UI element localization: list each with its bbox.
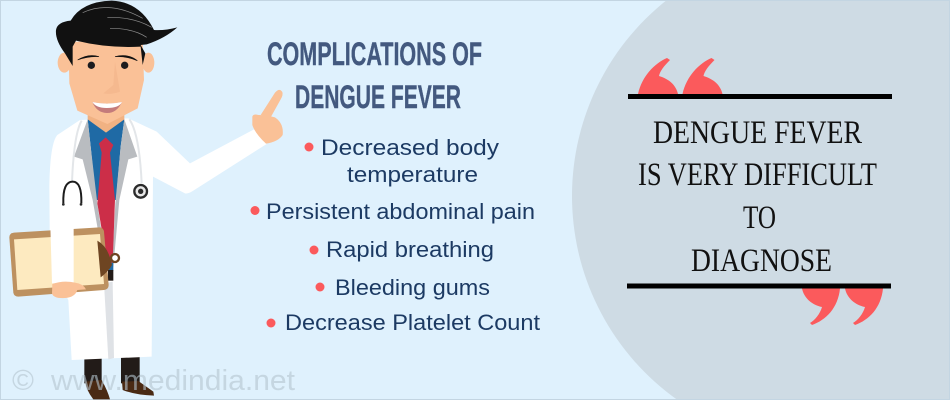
white coat and pointing arm	[49, 118, 267, 360]
doctor illustration	[9, 1, 283, 399]
item: decrease platelet count: Decrease Platelet Count	[285, 310, 540, 335]
pointing hand	[252, 90, 283, 144]
quote text: DENGUE FEVER	[653, 115, 862, 151]
bottom rule	[627, 284, 891, 288]
item: decreased body temperature: Decreased body	[321, 135, 499, 160]
panel: grey circle	[572, 0, 950, 400]
hair highlights	[83, 7, 152, 37]
item: decreased body temperature	[304, 135, 499, 187]
red tie	[97, 137, 115, 263]
complications list	[250, 135, 540, 335]
item: bleeding gums: Bleeding gums	[335, 275, 490, 300]
icon: closing quotation marks	[802, 288, 883, 325]
legs and shoes	[84, 353, 154, 399]
left sleeve	[50, 213, 74, 283]
item: persistent abdominal pain: Persistent abdominal pain	[266, 199, 535, 224]
clipboard	[9, 227, 109, 297]
icon: opening quotation marks	[638, 58, 722, 94]
clipboard clip	[97, 241, 119, 277]
coat fold	[104, 282, 114, 359]
item: rapid breathing: Rapid breathing	[326, 237, 494, 262]
face	[68, 42, 144, 124]
smile	[92, 102, 122, 113]
quote text: IS VERY DIFFICULT	[638, 157, 877, 193]
watermark: ©	[12, 365, 34, 397]
shirt tail and belt	[108, 263, 113, 281]
eyebrows and eyes	[78, 56, 137, 69]
stethoscope	[62, 119, 147, 206]
left hand	[52, 282, 86, 298]
heading: DENGUE FEVER	[295, 79, 461, 115]
quote text	[638, 115, 877, 279]
top rule	[628, 94, 892, 99]
item: decreased body temperature: temperature	[347, 162, 478, 187]
neck	[88, 113, 124, 133]
quote text: TO	[743, 200, 776, 236]
grey lapels	[74, 119, 137, 280]
watermark: www.medindia.net	[50, 365, 295, 397]
shirt	[88, 119, 124, 200]
nose shadow	[103, 62, 120, 94]
hair	[56, 1, 177, 66]
ears	[58, 53, 154, 73]
quote text: DIAGNOSE	[691, 243, 832, 279]
heading	[267, 36, 482, 115]
heading: COMPLICATIONS OF	[267, 36, 482, 72]
